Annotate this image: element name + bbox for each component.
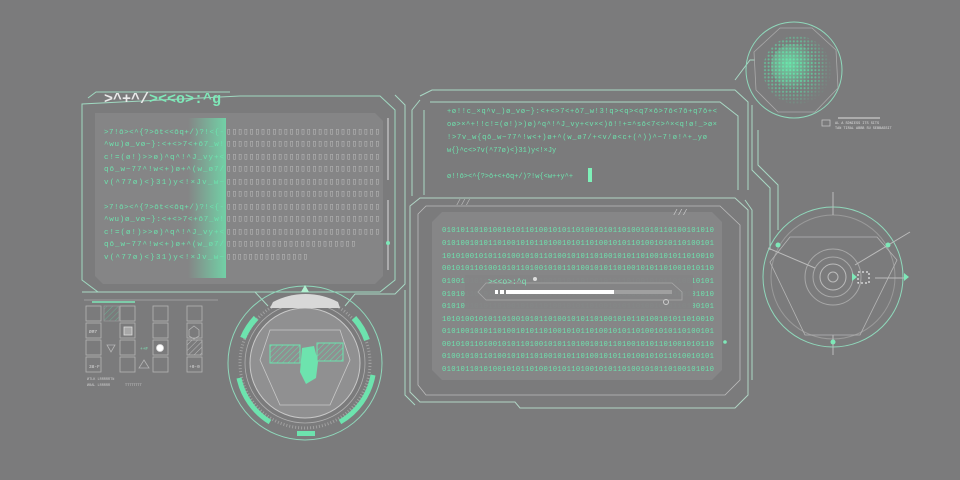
- text block: left encoded text: ^wu)ø_vø~}:<+<>7<+ō7_w!: [104, 140, 224, 149]
- panel: icon grid: ØTLK LRRRRRTN: [87, 377, 114, 382]
- text block: left encoded text: >7!ō><^{?>ōt<<ōq+/)?!<{-: [104, 128, 224, 137]
- text block: binary rows: 01010010101101001010110100101011010010101101001010110100101: [442, 328, 714, 336]
- text block: binary rows: 10101001010110100101011010010101101001010110100101011010010: [442, 253, 714, 261]
- text block: encoded lines: !>7v_w{qō_w~77^!w<+)ø+^(w_ø7/+<v/ø<c+(^))^~7!ø!^+_yø: [447, 133, 707, 142]
- panel: lower binary frame: [410, 198, 748, 408]
- text block: encoded lines: oø>×^+!!c!=(ø!)>)ø)^q^!^J_vy+<v×<)ō!!+=^sō<7<>^×<q!ø!_>ø×: [447, 120, 717, 129]
- text block: binary rows: 01001010110100101011010010101101001010110100101011010010101: [442, 278, 714, 286]
- connector lines right: [735, 60, 778, 380]
- cursor: [588, 168, 592, 182]
- panel: icon grid: ØBAL LRRRRR: [87, 383, 111, 388]
- text block: left encoded text: ▯▯▯▯▯▯▯▯▯▯▯▯▯▯▯▯▯▯▯▯▯▯▯▯▯▯▯: [226, 202, 380, 212]
- panel: icon grid: 38-F: [89, 364, 100, 370]
- satellite: [270, 343, 343, 384]
- text block: left encoded text: ▯▯▯▯▯▯▯▯▯▯▯▯▯▯▯▯▯▯▯▯▯▯▯▯▯▯▯: [226, 227, 380, 237]
- panel: lower binary frame: ///: [673, 209, 688, 218]
- text block: left encoded text: c!=(ø!)>>ø)^q^!^J_vy+<: [104, 153, 224, 162]
- text block: left encoded text: ▯▯▯▯▯▯▯▯▯▯▯▯▯▯▯▯▯▯▯▯▯▯▯▯▯▯▯: [226, 177, 380, 187]
- text block: left encoded text: c!=(ø!)>>ø)^q^!^J_vy+<: [104, 228, 224, 237]
- text block: left encoded text: [104, 118, 380, 278]
- text block: binary rows: 01010110101001010110100101011010010101101001010110100101010: [442, 227, 714, 235]
- title: >^+^/><<o>:^g: [104, 91, 221, 108]
- connector lines bottom left: [82, 95, 415, 405]
- label: sphere caption: AL A SDNIESS ITS SITS: [835, 122, 879, 126]
- panel: top right text frame: [412, 90, 748, 196]
- text block: left encoded text: ▯▯▯▯▯▯▯▯▯▯▯▯▯▯▯▯▯▯▯▯▯▯▯▯▯▯▯: [226, 152, 380, 162]
- text block: left encoded text: ▯▯▯▯▯▯▯▯▯▯▯▯▯▯▯▯▯▯▯▯▯▯▯▯▯▯▯: [226, 164, 380, 174]
- progress overlay: ><<o>:^q: [488, 278, 527, 287]
- panel: icon grid: TTTTTTTT: [125, 384, 142, 388]
- text block: left encoded text: v(^77ø)<}31)y<!×Jv_w~: [104, 178, 224, 187]
- text block: left encoded text: ▯▯▯▯▯▯▯▯▯▯▯▯▯▯▯▯▯▯▯▯▯▯▯▯▯▯▯: [226, 127, 380, 137]
- text block: binary rows: 01010010101101001010110100101011010010101101001010110100101: [442, 240, 714, 248]
- text block: left encoded text: >7!ō><^{?>ōt<<ōq+/)?!<{-: [104, 203, 224, 212]
- label: sphere caption: [822, 118, 892, 131]
- text block: binary rows: 10101001010110100101011010010101101001010110100101011010010: [442, 316, 714, 324]
- text block: binary rows: 01010110101001010110100101011010010101101001010110100101010: [442, 366, 714, 374]
- icon: dotted sphere: [746, 22, 842, 118]
- text block: binary rows: [442, 227, 714, 374]
- icon: radar: [763, 192, 910, 355]
- label: sphere caption: TAN TIRAL ABBB SU SEBBASSIT: [835, 127, 892, 131]
- text block: left encoded text: ▯▯▯▯▯▯▯▯▯▯▯▯▯▯▯▯▯▯▯▯▯▯▯▯▯▯▯: [226, 214, 380, 224]
- panel: lower binary frame: ///: [456, 199, 471, 208]
- text block: left encoded text: ▯▯▯▯▯▯▯▯▯▯▯▯▯▯▯: [226, 252, 308, 262]
- text block: left encoded text: qō_w~77^!w<+)ø+^(w_ø7/: [104, 165, 224, 174]
- text block: binary rows: 01001010110100101011010010101101001010110100101011010010101: [442, 353, 714, 361]
- text block: encoded lines: +ø!!c_×q^v_)ø_vø~}:<+<>7<+ō7_w!3!q><q><q7×ō>7ō<7ō+q7ō+<: [447, 107, 717, 116]
- progress overlay: [465, 275, 693, 309]
- panel: icon grid: ØЯ7: [89, 328, 97, 335]
- text block: left encoded text: ^wu)ø_vø~}:<+<>7<+ō7_w!: [104, 215, 224, 224]
- text block: left encoded text: ▯▯▯▯▯▯▯▯▯▯▯▯▯▯▯▯▯▯▯▯▯▯▯▯▯▯▯: [226, 189, 380, 199]
- icon: satellite scope: [228, 285, 382, 440]
- text block: binary rows: 00101011010010101101001010110100101011010010101101001010110: [442, 265, 714, 273]
- text block: encoded lines: [447, 107, 717, 181]
- panel: icon grid: +0-0: [189, 364, 200, 370]
- panel: icon grid: [84, 300, 218, 388]
- text block: left encoded text: ▯▯▯▯▯▯▯▯▯▯▯▯▯▯▯▯▯▯▯▯▯▯▯▯▯▯▯: [226, 139, 380, 149]
- text block: binary rows: 01010110101001010110100101011010010101101001010110100101010: [442, 291, 714, 299]
- text block: left encoded text: ▯▯▯▯▯▯▯▯▯▯▯▯▯▯▯▯▯▯▯▯▯▯▯: [226, 239, 356, 249]
- panel: left decoding frame: [82, 91, 395, 292]
- text block: left encoded text: v(^77ø)<}31)y<!×Jv_w~: [104, 253, 224, 262]
- text block: encoded lines: ø!!ō><^{?>ō+<+ōq+/)?!w{<w++y^+: [447, 172, 573, 181]
- text block: encoded lines: w{}^c<>7v(^77ø)<}31)y<!×Jy: [447, 146, 556, 155]
- panel: icon grid: ++F: [140, 346, 148, 352]
- text block: binary rows: 00101011010010101101001010110100101011010010101101001010110: [442, 341, 714, 349]
- text block: left encoded text: qō_w~77^!w<+)ø+^(w_ø7/: [104, 240, 224, 249]
- text block: binary rows: 01010010101101001010110100101011010010101101001010110100101: [442, 303, 714, 311]
